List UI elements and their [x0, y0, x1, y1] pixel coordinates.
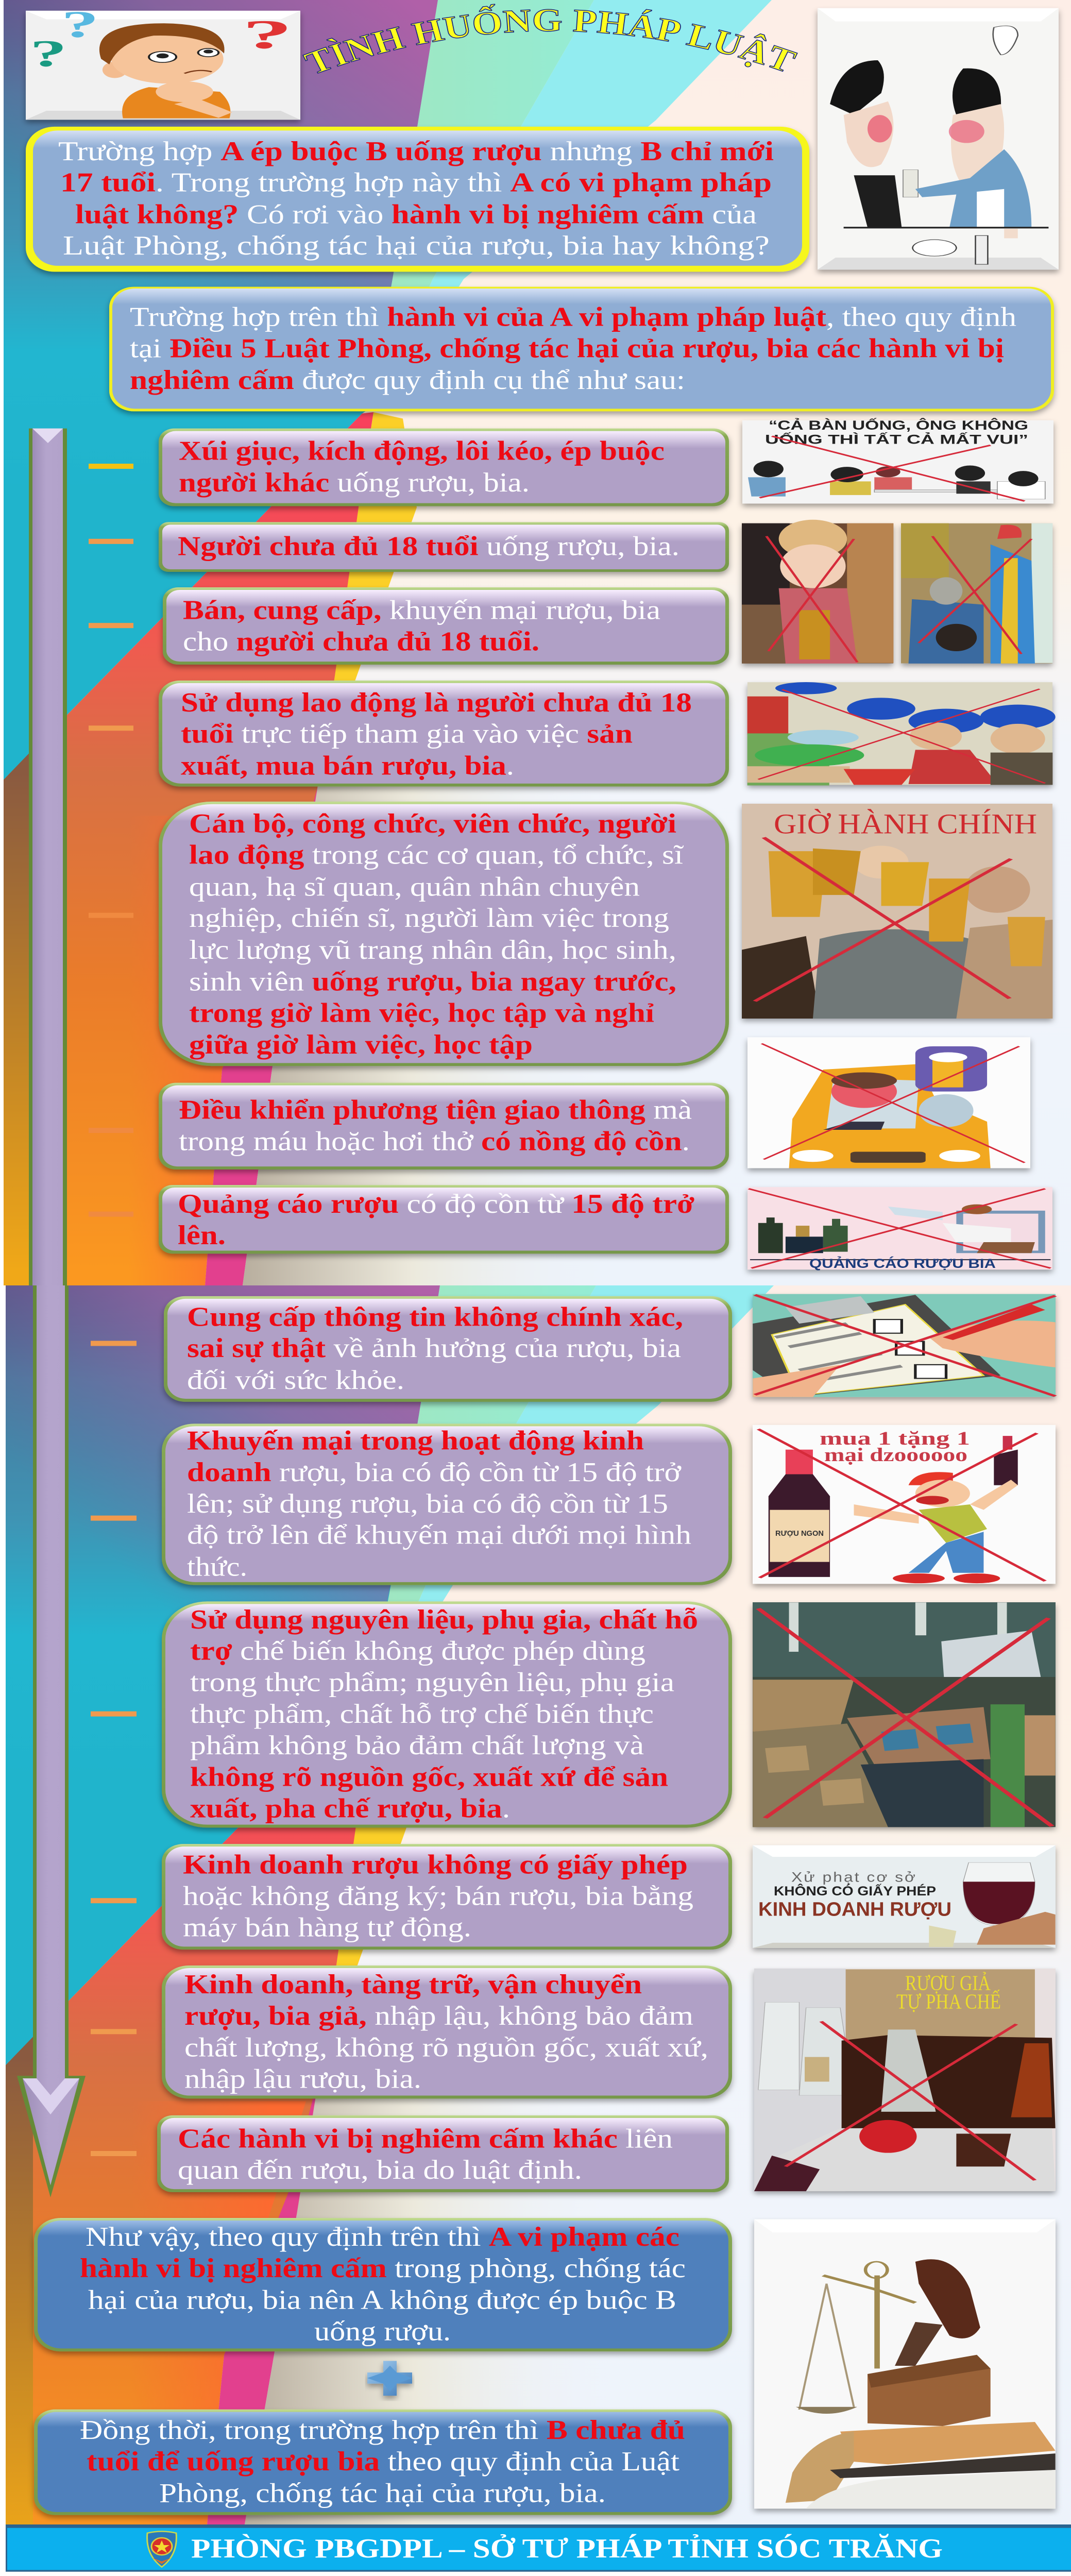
image: unlicensed alcohol business — [753, 1845, 1056, 1948]
panel: item 7 advertising: lên. — [178, 1220, 226, 1250]
panel: item 12 counterfeit — [162, 1965, 732, 2098]
arrow: vertical timeline — [17, 429, 86, 2197]
image: office hours beer toast crossed out — [742, 804, 1052, 1019]
panel: item 3 selling: cho người chưa đủ 18 tuổi. — [183, 626, 539, 656]
image: unlicensed alcohol business: Xử phạt cơ sở — [791, 1870, 915, 1885]
question box shape — [26, 127, 809, 272]
image: office hours beer toast crossed out: GIỜ HÀNH CHÍNH — [774, 809, 1037, 840]
panel: item 5 officials: trong giờ làm việc, học tập và nghỉ — [189, 997, 654, 1028]
panel: legal basis — [109, 287, 1054, 411]
legal basis text — [130, 301, 1016, 395]
panel: item 1 incitement: người khác uống rượu, bia. — [179, 467, 530, 498]
panel: item 9 promotion — [162, 1423, 732, 1585]
legal basis text: Trường hợp trên thì hành vi của A vi phạm pháp luật, theo quy định — [130, 301, 1016, 332]
image: buy one get one promotion crossed out: mại dzoooooo — [824, 1444, 967, 1465]
panel: conclusion about A — [34, 2218, 732, 2351]
panel: conclusion about B: Phòng, chống tác hại của rượu, bia. — [159, 2478, 606, 2508]
panel: conclusion about A: hành vi bị nghiêm cấm trong phòng, chống tác — [80, 2253, 686, 2283]
panel: item 9 promotion: thức. — [187, 1551, 247, 1582]
panel: item 6 driving: trong máu hoặc hơi thở có nồng độ cồn. — [179, 1126, 690, 1156]
icon: justice department emblem — [147, 2531, 176, 2567]
panel: item 4 child labour: tuổi trực tiếp tham gia vào việc sản — [181, 719, 633, 749]
question text: Trường hợp A ép buộc B uống rượu nhưng B chỉ mới — [58, 136, 774, 166]
panel: item 5 officials — [159, 802, 729, 1066]
panel: item 8 false information: Cung cấp thông tin không chính xác, — [187, 1301, 683, 1332]
image: buy one get one promotion crossed out — [753, 1425, 1056, 1584]
image: child workers crossed out — [747, 682, 1056, 785]
icon: plus sign — [367, 2361, 412, 2396]
image: drinking cartoon crossed out: “CẢ BÀN UỐNG, ÔNG KHÔNG — [769, 418, 1028, 433]
footer text: PHÒNG PBGDPL – SỞ TƯ PHÁP TỈNH SÓC TRĂNG — [191, 2533, 943, 2564]
icon: confused boy with question marks: ? — [242, 12, 293, 57]
panel: item 10 ingredients: Sử dụng nguyên liệu, phụ gia, chất hỗ — [190, 1604, 698, 1635]
image: drunk driver crossed out — [747, 1037, 1030, 1168]
panel: item 10 ingredients: xuất, pha chế rượu, bia. — [190, 1793, 510, 1823]
panel: item 11 no licence: hoặc không đăng ký; bán rượu, bia bằng — [183, 1880, 693, 1911]
question text: Luật Phòng, chống tác hại của rượu, bia hay không? — [63, 230, 770, 261]
panel: item 13 other acts: quan đến rượu, bia do luật định. — [178, 2155, 582, 2185]
question text — [58, 136, 774, 261]
panel: item 8 false information: sai sự thật về ảnh hưởng của rượu, bia — [187, 1333, 681, 1363]
legal basis text: tại Điều 5 Luật Phòng, chống tác hại của rượu, bia các hành vi bị — [130, 333, 1004, 363]
panel: item 8 false information — [164, 1296, 732, 1402]
image: counterfeit alcohol crossed out: RƯỢU GIẢ — [905, 1971, 991, 1995]
image: warehouse raid crossed out — [753, 1602, 1056, 1827]
panel: item 5 officials: Cán bộ, công chức, viên chức, người — [189, 808, 676, 839]
panel: item 2 under 18 — [159, 522, 729, 572]
panel: conclusion about B: Đồng thời, trong trường hợp trên thì B chưa đủ — [80, 2415, 685, 2445]
panel: item 1 incitement — [159, 429, 729, 506]
panel: item 12 counterfeit: chất lượng, không rõ nguồn gốc, xuất xứ, — [184, 2032, 708, 2062]
image: unlicensed alcohol business: KINH DOANH RƯỢU — [758, 1898, 951, 1920]
image: child with beer crossed out — [742, 520, 893, 664]
background panel: upper half — [4, 0, 1071, 1285]
panel: item 9 promotion: lên; sử dụng rượu, bia có độ cồn từ 15 — [187, 1488, 668, 1519]
panel: conclusion about A: hại của rượu, bia nên A không được ép buộc B — [88, 2285, 676, 2315]
panel: item 6 driving: Điều khiển phương tiện giao thông mà — [179, 1095, 692, 1125]
question text: 17 tuổi. Trong trường hợp này thì A có vi phạm pháp — [60, 167, 772, 197]
image: alcohol advertising crossed out — [747, 1187, 1052, 1270]
panel: item 5 officials: lao động trong các cơ quan, tổ chức, sĩ — [189, 840, 684, 870]
legal basis text: nghiêm cấm được quy định cụ thể như sau: — [130, 365, 685, 395]
icon: two men arguing over a drink — [818, 8, 1059, 269]
image: buy one get one promotion crossed out: mua 1 tặng 1 — [820, 1428, 970, 1449]
panel: item 5 officials: nghiệp, chiến sĩ, người làm việc trong — [189, 903, 669, 933]
icon: confused boy with question marks — [26, 3, 300, 120]
panel: item 13 other acts: Các hành vi bị nghiêm cấm khác liên — [178, 2123, 673, 2154]
image: counterfeit alcohol crossed out — [754, 1969, 1056, 2191]
image: gavel scales and law books — [754, 2219, 1056, 2509]
image: false form crossed out — [753, 1294, 1056, 1397]
image: counterfeit alcohol crossed out: TỰ PHA CHẾ — [896, 1989, 1001, 2013]
title: arched heading: TÌNH HUỐNG PHÁP LUẬT — [302, 4, 798, 74]
icon: confused boy with question marks: ? — [30, 32, 67, 75]
panel: item 12 counterfeit: nhập lậu rượu, bia. — [184, 2063, 421, 2094]
panel: item 7 advertising: Quảng cáo rượu có độ cồn từ 15 độ trở — [178, 1189, 694, 1219]
panel: item 9 promotion: độ trở lên để khuyến mại dưới mọi hình — [187, 1520, 691, 1550]
markers: dashes beside each item — [89, 464, 137, 2156]
panel: item 3 selling: Bán, cung cấp, khuyến mại rượu, bia — [183, 595, 660, 625]
panel: item 10 ingredients: thực phẩm, chất hỗ trợ chế biến thực — [190, 1699, 654, 1729]
panel: item 9 promotion: doanh rượu, bia có độ cồn từ 15 độ trở — [187, 1457, 682, 1487]
panel: item 10 ingredients: không rõ nguồn gốc, xuất xứ để sản — [190, 1762, 668, 1792]
panel: item 13 other acts — [157, 2115, 729, 2192]
panel: item 1 incitement: Xúi giục, kích động, lôi kéo, ép buộc — [179, 435, 665, 466]
panel: item 4 child labour — [159, 681, 729, 787]
panel: item 10 ingredients: phẩm không bảo đảm chất lượng và — [190, 1730, 644, 1760]
panel: item 5 officials: sinh viên uống rượu, bia ngay trước, — [189, 966, 676, 996]
panel: item 7 advertising — [159, 1185, 729, 1253]
panel: item 5 officials: lực lượng vũ trang nhân dân, học sinh, — [189, 935, 676, 965]
image: buy one get one promotion crossed out: RƯỢU NGON — [775, 1529, 824, 1537]
panel: item 6 driving — [159, 1083, 729, 1170]
panel: item 4 child labour: xuất, mua bán rượu, bia. — [181, 750, 514, 781]
legal basis box shape — [109, 287, 1054, 411]
panel: item 12 counterfeit: rượu, bia giả, nhập lậu, không bảo đảm — [184, 2001, 693, 2031]
image: alcohol advertising crossed out: QUẢNG CÁO RƯỢU BIA — [809, 1256, 996, 1270]
panel: item 4 child labour: Sử dụng lao động là người chưa đủ 18 — [181, 687, 692, 718]
footer banner — [6, 2524, 1071, 2572]
panel: item 11 no licence: Kinh doanh rượu không có giấy phép — [183, 1850, 688, 1879]
icon: confused boy with question marks: ? — [61, 3, 99, 45]
panel: item 12 counterfeit: Kinh doanh, tàng trữ, vận chuyển — [184, 1969, 642, 1999]
panel: item 3 selling — [163, 587, 729, 665]
image: drinking cartoon crossed out — [742, 418, 1053, 504]
panel: conclusion about B: tuổi để uống rượu bia theo quy định của Luật — [87, 2446, 679, 2477]
panel: conclusion about A: uống rượu. — [314, 2316, 451, 2346]
panel: item 10 ingredients: trợ chế biến không được phép dùng — [190, 1636, 645, 1666]
panel: item 10 ingredients: trong thực phẩm; nguyên liệu, phụ gia — [190, 1667, 674, 1697]
panel: item 5 officials: quan, hạ sĩ quan, quân nhân chuyên — [189, 871, 640, 902]
panel: item 2 under 18: Người chưa đủ 18 tuổi uống rượu, bia. — [178, 531, 679, 561]
panel: item 8 false information: đối với sức khỏe. — [187, 1365, 404, 1395]
panel: item 9 promotion: Khuyến mại trong hoạt động kinh — [187, 1425, 644, 1455]
image: teenagers drinking crossed out — [901, 523, 1052, 664]
background panel: lower half — [6, 1285, 1071, 2524]
panel: item 10 ingredients — [162, 1601, 732, 1828]
panel: legal question — [26, 127, 809, 272]
panel: item 5 officials: giữa giờ làm việc, học tập — [189, 1029, 533, 1060]
panel: conclusion about A: Như vậy, theo quy định trên thì A vi phạm các — [86, 2222, 679, 2252]
image: unlicensed alcohol business: KHÔNG CÓ GIẤY PHÉP — [774, 1884, 936, 1899]
question text: luật không? Có rơi vào hành vi bị nghiêm cấm của — [75, 199, 757, 229]
panel: conclusion about B — [34, 2410, 732, 2515]
panel: item 11 no licence: máy bán hàng tự động. — [183, 1912, 471, 1942]
image: drinking cartoon crossed out: UỐNG THÌ TẤT CẢ MẤT VUI” — [765, 432, 1028, 447]
panel: item 11 no licence — [162, 1844, 732, 1950]
